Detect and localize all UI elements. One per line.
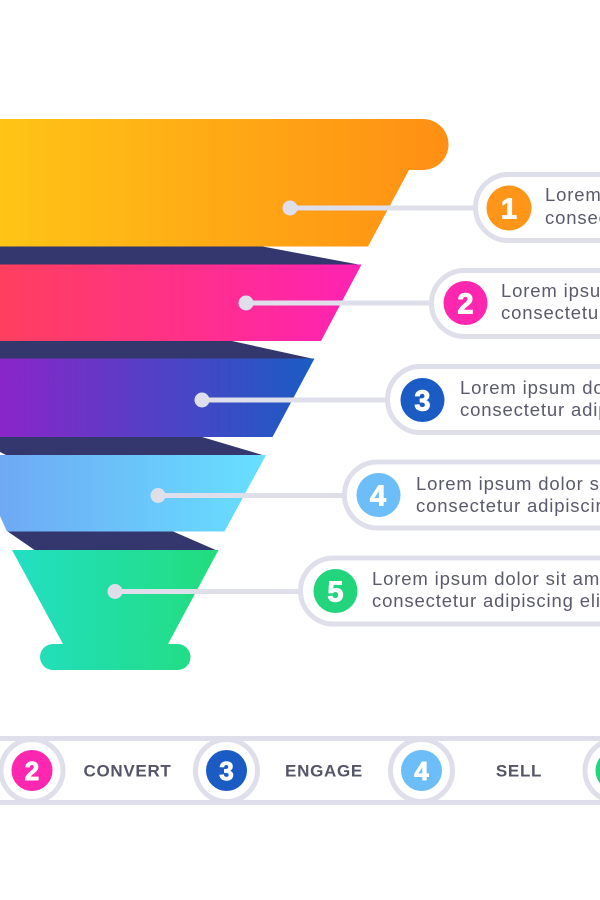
step 4	[390, 740, 452, 802]
funnel shadow band 3	[0, 437, 266, 456]
funnel shadow band 4	[7, 531, 218, 551]
funnel band 1	[0, 119, 448, 246]
leader dot 1	[282, 200, 298, 216]
pill 1	[476, 174, 600, 240]
leader line 4	[158, 493, 345, 498]
bar outline	[0, 738, 600, 802]
leader dot 4	[150, 488, 166, 503]
number badge 1	[486, 186, 532, 230]
callout 2	[238, 270, 600, 336]
funnel shadow band 1	[0, 246, 361, 265]
label engage: ENGAGE	[285, 762, 363, 780]
funnel band 5 with base	[12, 550, 218, 670]
step 2: 2	[25, 756, 39, 786]
pill 4	[344, 462, 600, 528]
number badge 2	[444, 281, 488, 325]
number badge 5: 5	[327, 576, 344, 608]
step 5	[585, 740, 600, 802]
label sell: SELL	[496, 762, 542, 780]
leader line 3	[202, 398, 388, 402]
pill 3	[388, 366, 600, 432]
leader dot 2	[238, 296, 254, 310]
number badge 2: 2	[457, 288, 474, 320]
step 4: 4	[414, 756, 429, 786]
pill 5	[300, 558, 600, 624]
number badge 1: 1	[501, 194, 517, 226]
funnel shadow band 2	[0, 341, 314, 359]
leader line 1	[290, 206, 476, 210]
funnel band 4	[0, 455, 266, 532]
step 3	[196, 740, 258, 802]
step 2	[1, 740, 63, 802]
callout 5	[108, 558, 600, 624]
bottom step bar	[0, 738, 600, 802]
number badge 3	[400, 378, 444, 422]
funnel chart	[0, 119, 448, 670]
step 3: 3	[219, 756, 234, 786]
callout 1	[282, 174, 600, 240]
number badge 4: 4	[370, 480, 386, 512]
callout 3	[194, 366, 600, 432]
funnel band 2	[0, 264, 362, 341]
leader line 5	[115, 589, 301, 594]
leader line 2	[246, 300, 432, 306]
label convert: CONVERT	[83, 762, 172, 780]
funnel band 3	[0, 358, 314, 437]
callout 4	[150, 462, 600, 528]
number badge 3: 3	[414, 386, 431, 418]
leader dot 5	[108, 584, 122, 599]
number badge 5	[314, 569, 358, 613]
number badge 4	[356, 473, 400, 517]
leader dot 3	[194, 392, 210, 408]
pill 2	[432, 270, 600, 336]
